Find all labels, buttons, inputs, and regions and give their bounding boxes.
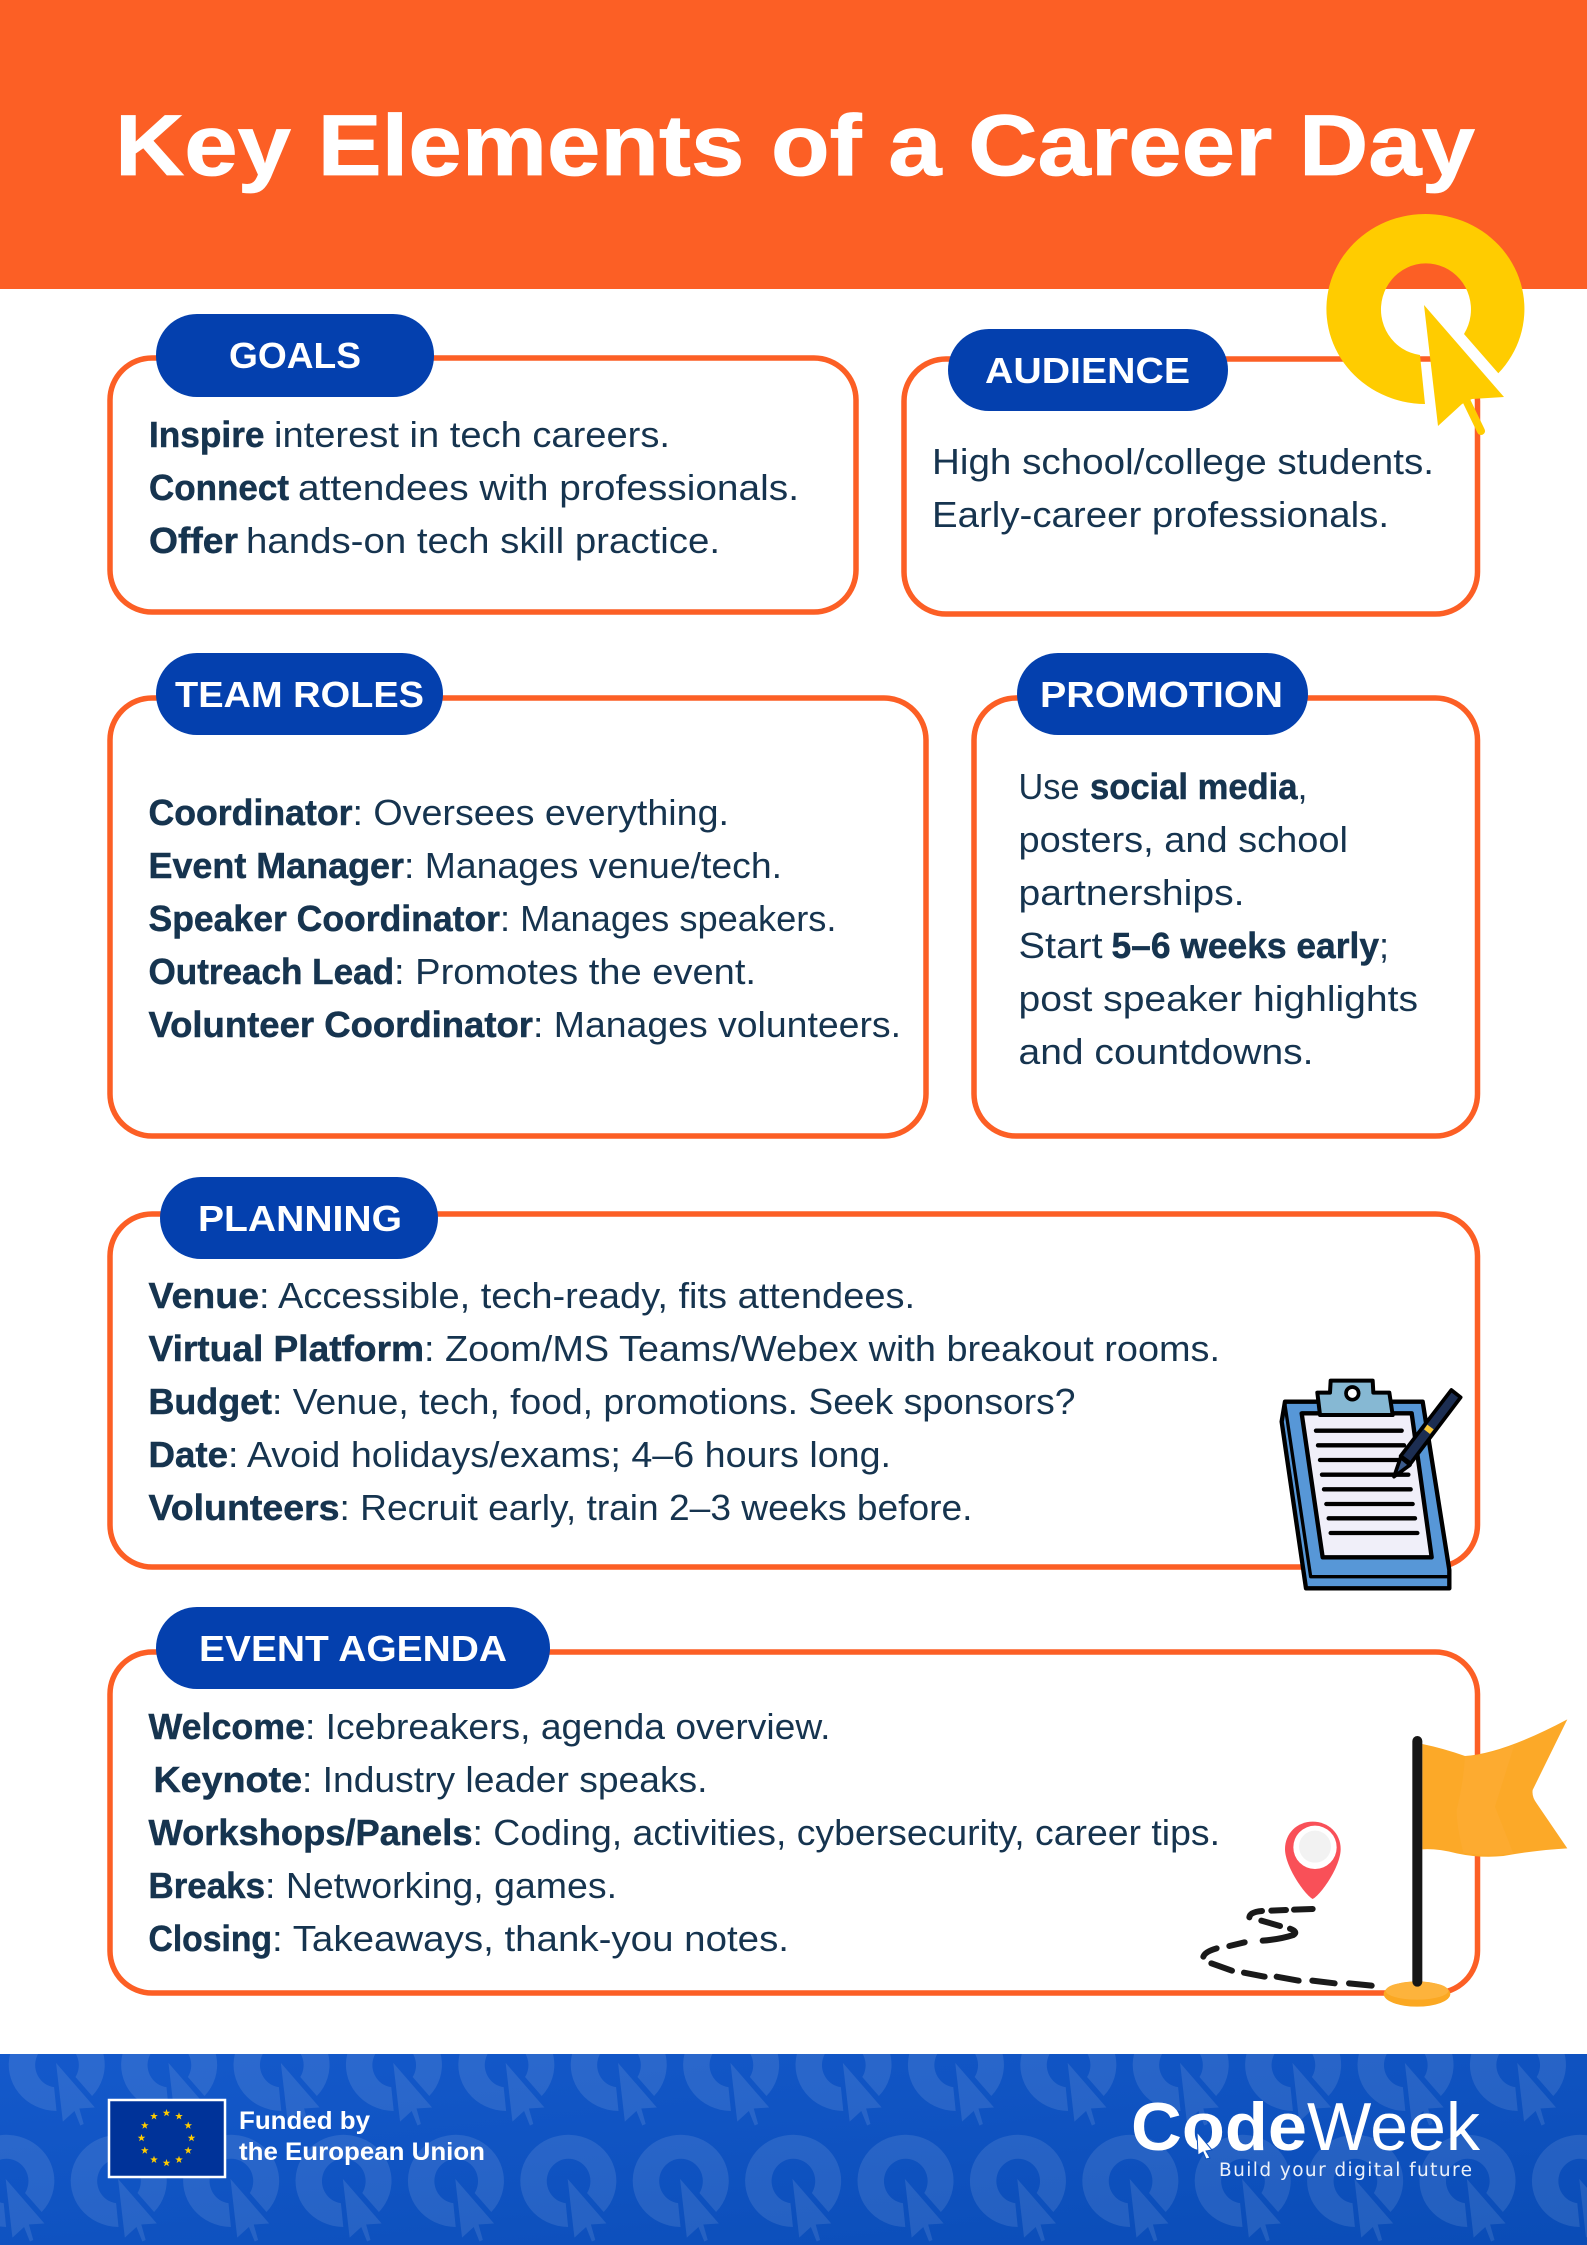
team roles text: Volunteer Coordinator	[148, 1004, 533, 1045]
panel: team roles	[110, 653, 926, 1136]
funded by text: the European Union	[239, 2138, 485, 2166]
planning text	[148, 1275, 1220, 1528]
promotion text: Use	[1018, 766, 1080, 807]
CodeWeek logo	[1131, 2089, 1481, 2181]
planning text: : Recruit early, train 2–3 weeks before.	[340, 1487, 972, 1528]
event agenda text: Keynote	[154, 1759, 302, 1800]
panel: goals	[110, 314, 856, 612]
event agenda text: Workshops/Panels	[148, 1812, 472, 1853]
planning text: Venue	[148, 1275, 259, 1316]
panel: promotion	[974, 653, 1478, 1136]
audience text	[932, 441, 1434, 535]
team roles text: : Promotes the event.	[394, 951, 756, 992]
team roles text: : Manages volunteers.	[533, 1004, 901, 1045]
heading pill: planning	[160, 1177, 438, 1259]
promotion text: 5–6 weeks early	[1112, 925, 1379, 966]
funded by text	[239, 2107, 485, 2166]
goals text	[149, 414, 799, 561]
event agenda text: : Icebreakers, agenda overview.	[305, 1706, 830, 1747]
title: Key Elements of a Career Day	[115, 98, 1475, 194]
event agenda text	[148, 1706, 1220, 1959]
heading pill: audience: AUDIENCE	[985, 350, 1190, 391]
team roles text: Event Manager	[148, 845, 404, 886]
event agenda text: Welcome	[148, 1706, 305, 1747]
heading pill: promotion: PROMOTION	[1040, 674, 1283, 715]
team roles text: Coordinator	[148, 792, 352, 833]
goals text: interest in tech careers.	[274, 414, 670, 455]
team roles text: : Manages venue/tech.	[404, 845, 782, 886]
team roles text: Speaker Coordinator	[148, 898, 500, 939]
EU flag	[109, 2100, 225, 2177]
goals text: Offer	[149, 520, 238, 561]
event agenda text: : Coding, activities, cybersecurity, career tips.	[472, 1812, 1220, 1853]
footer pattern of logo marks	[0, 2054, 1587, 2242]
icon: yellow logo ring with cursor	[1326, 214, 1524, 431]
CodeWeek logo: Week	[1307, 2089, 1481, 2165]
team roles text	[148, 792, 901, 1045]
planning text: Virtual Platform	[148, 1328, 424, 1369]
goals text: Connect	[149, 467, 289, 508]
promotion text: ;	[1379, 925, 1389, 966]
event agenda text: : Networking, games.	[265, 1865, 617, 1906]
event agenda text: Breaks	[148, 1865, 265, 1906]
heading pill: event agenda	[156, 1607, 550, 1689]
promotion text: posters, and school	[1018, 819, 1348, 860]
heading pill: audience	[948, 329, 1228, 411]
team roles text: : Oversees everything.	[352, 792, 729, 833]
event agenda text: : Industry leader speaks.	[302, 1759, 708, 1800]
goals text: Inspire	[149, 414, 264, 455]
planning text: : Accessible, tech-ready, fits attendees.	[259, 1275, 915, 1316]
heading pill: event agenda: EVENT AGENDA	[199, 1628, 507, 1669]
planning text: Volunteers	[148, 1487, 340, 1528]
planning text: Budget	[148, 1381, 272, 1422]
heading pill: team roles: TEAM ROLES	[175, 674, 424, 715]
planning text: : Venue, tech, food, promotions. Seek sponsors?	[272, 1381, 1076, 1422]
goals text: hands-on tech skill practice.	[246, 520, 720, 561]
goals text: attendees with professionals.	[298, 467, 799, 508]
promotion text	[1018, 766, 1418, 1072]
panel: planning	[110, 1177, 1478, 1567]
heading pill: planning: PLANNING	[198, 1198, 402, 1239]
footer band	[0, 2054, 1587, 2245]
CodeWeek logo: Build your digital future	[1219, 2160, 1472, 2181]
promotion text: and countdowns.	[1018, 1031, 1314, 1072]
icon: orange flag on pole	[1384, 1719, 1567, 2007]
event agenda text: Closing	[148, 1918, 272, 1959]
funded by text: Funded by	[239, 2107, 370, 2135]
CodeWeek logo: Code	[1131, 2089, 1307, 2165]
heading pill: team roles	[156, 653, 443, 735]
promotion text: social media	[1090, 766, 1298, 807]
heading pill: goals	[156, 314, 434, 397]
header banner	[0, 0, 1587, 289]
planning text: Date	[148, 1434, 228, 1475]
panel: audience	[904, 329, 1478, 614]
planning text: : Avoid holidays/exams; 4–6 hours long.	[228, 1434, 891, 1475]
team roles text: Outreach Lead	[148, 951, 394, 992]
promotion text: Start	[1018, 925, 1102, 966]
audience text: Early-career professionals.	[932, 494, 1389, 535]
icon: clipboard with pen	[1282, 1381, 1461, 1588]
event agenda text: : Takeaways, thank-you notes.	[272, 1918, 789, 1959]
planning text: : Zoom/MS Teams/Webex with breakout rooms.	[424, 1328, 1220, 1369]
panel: event agenda	[110, 1607, 1478, 1993]
promotion text: post speaker highlights	[1018, 978, 1418, 1019]
promotion text: partnerships.	[1018, 872, 1244, 913]
team roles text: : Manages speakers.	[500, 898, 836, 939]
promotion text: ,	[1298, 766, 1308, 807]
heading pill: promotion	[1017, 653, 1308, 735]
heading pill: goals: GOALS	[229, 335, 361, 376]
icon: map pin with dashed path	[1203, 1822, 1372, 1986]
audience text: High school/college students.	[932, 441, 1434, 482]
